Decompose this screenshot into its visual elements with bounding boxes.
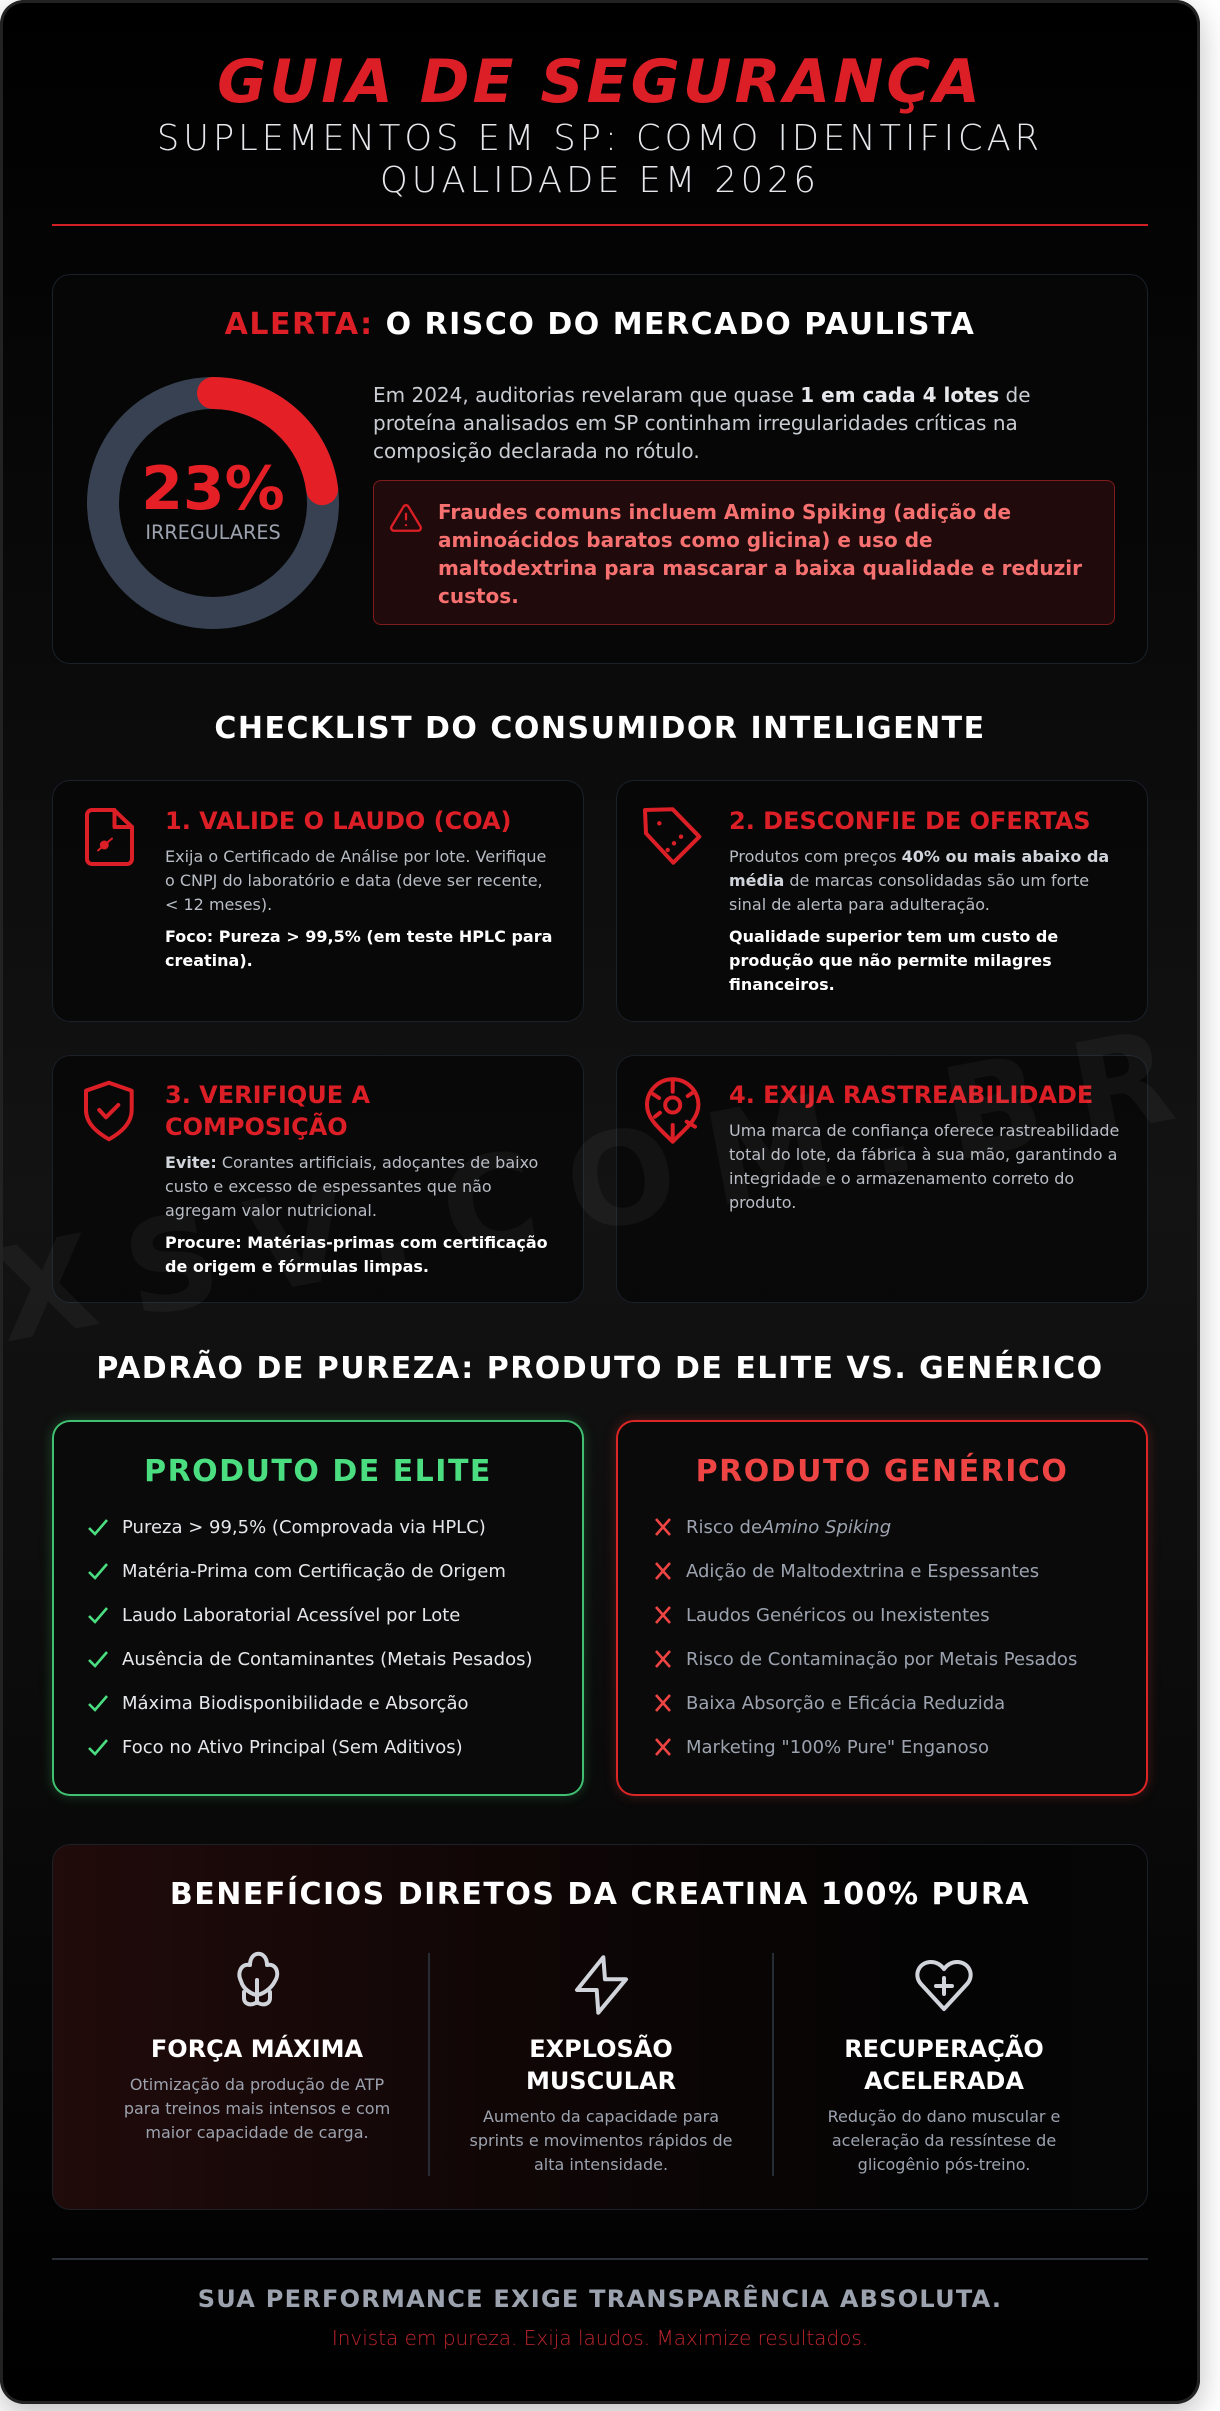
card focus text: Qualidade superior tem um custo de [729, 927, 1058, 946]
panel: elite product [52, 1420, 584, 1796]
elite list: Máxima Biodisponibilidade e Absorção [122, 1693, 468, 1714]
benefit text: Redução do dano muscular e [828, 2107, 1060, 2126]
benefit title [844, 2034, 1044, 2095]
generic list: Baixa Absorção e Eficácia Reduzida [686, 1693, 1005, 1714]
subtitle: QUALIDADE EM 2026 [380, 160, 820, 201]
card focus text: Foco: Pureza > 99,5% (em teste HPLC para [165, 927, 552, 946]
donut chart 23%: IRREGULARES [145, 521, 281, 544]
benefit title: RECUPERAÇÃO [844, 2035, 1044, 2063]
benefit text: Aumento da capacidade para [483, 2107, 719, 2126]
elite list: Ausência de Contaminantes (Metais Pesados) [122, 1649, 532, 1670]
benefit text: para treinos mais intensos e com [124, 2099, 390, 2118]
donut chart 23% [87, 377, 339, 629]
card focus text: produção que não permite milagres [729, 951, 1052, 970]
card text: Uma marca de confiança oferece rastreabilidade [729, 1121, 1119, 1140]
benefits heading: BENEFÍCIOS DIRETOS DA CREATINA 100% PURA [170, 1877, 1030, 1912]
benefit text: glicogênio pós-treino. [858, 2155, 1030, 2174]
elite list [88, 1517, 532, 1758]
card text: total do lote, da fábrica à sua mão, garantindo a [729, 1145, 1117, 1164]
icon: document [85, 808, 134, 866]
benefit: recovery [828, 1960, 1060, 2174]
panel: card 1 [52, 780, 584, 1022]
divider [428, 1953, 430, 2176]
card focus text [729, 927, 1058, 994]
generic list: Risco deAmino Spiking [686, 1517, 891, 1538]
benefit text [470, 2107, 732, 2174]
panel: benefits [52, 1844, 1148, 2210]
warning text: maltodextrina para mascarar a baixa qualidade e reduzir [438, 556, 1082, 580]
card focus text [165, 927, 552, 970]
icon: heart plus [915, 1960, 973, 2012]
panel: card 3 [52, 1055, 584, 1303]
heading: checklist: CHECKLIST DO CONSUMIDOR INTELIGENTE [214, 711, 986, 746]
panel: card 2 [616, 780, 1148, 1022]
card text: o CNPJ do laboratório e data (deve ser recente, [165, 871, 543, 890]
card focus text: Procure: Matérias-primas com certificação [165, 1233, 548, 1252]
benefit text: alta intensidade. [534, 2155, 668, 2174]
generic list: Laudos Genéricos ou Inexistentes [686, 1605, 990, 1626]
card title: 1. VALIDE O LAUDO (COA) [165, 807, 512, 835]
card text: sinal de alerta para adulteração. [729, 895, 990, 914]
benefit text: sprints e movimentos rápidos de [470, 2131, 732, 2150]
card title: 2. DESCONFIE DE OFERTAS [729, 807, 1091, 835]
icon: warning triangle [390, 504, 422, 532]
benefit title: MUSCULAR [526, 2067, 676, 2095]
icon: shield [84, 1080, 134, 1142]
icon: lightning bolt [574, 1955, 628, 2015]
alert text: proteína analisados em SP continham irregularidades críticas na [373, 411, 1018, 435]
warning box [373, 480, 1115, 625]
footer headline: SUA PERFORMANCE EXIGE TRANSPARÊNCIA ABSOLUTA. [198, 2285, 1002, 2313]
generic list [655, 1517, 1077, 1758]
card text: < 12 meses). [165, 895, 272, 914]
footer tagline: Invista em pureza. Exija laudos. Maximize resultados. [332, 2326, 868, 2350]
benefit: explosion [470, 1955, 732, 2174]
panel: generic product [616, 1420, 1148, 1796]
card text: média de marcas consolidadas são um forte [729, 871, 1089, 890]
card focus text: de origem e fórmulas limpas. [165, 1257, 429, 1276]
card text: integridade e o armazenamento correto do [729, 1169, 1074, 1188]
benefit title: FORÇA MÁXIMA [151, 2035, 363, 2063]
elite list: Matéria-Prima com Certificação de Origem [122, 1561, 506, 1582]
warning text [438, 500, 1082, 608]
panel: card 4 [616, 1055, 1148, 1303]
subtitle: SUPLEMENTOS EM SP: COMO IDENTIFICAR [157, 118, 1043, 159]
generic list: Adição de Maltodextrina e Espessantes [686, 1561, 1039, 1582]
benefit title: ACELERADA [864, 2067, 1024, 2095]
card text [729, 847, 1109, 914]
heading: purity standard: PADRÃO DE PUREZA: PRODUTO DE ELITE VS. GENÉRICO [96, 1351, 1104, 1386]
card focus text: creatina). [165, 951, 253, 970]
card text: custo e excesso de espessantes que não [165, 1177, 492, 1196]
benefit text [828, 2107, 1060, 2174]
donut chart 23%: 23% [141, 454, 285, 524]
watermark: XSV.COM.BR [0, 996, 1200, 1372]
alert text: composição declarada no rótulo. [373, 439, 700, 463]
subtitle [157, 118, 1043, 201]
benefit title [526, 2034, 676, 2095]
elite list: Laudo Laboratorial Acessível por Lote [122, 1605, 460, 1626]
generic list: Risco de Contaminação por Metais Pesados [686, 1649, 1077, 1670]
generic heading: PRODUTO GENÉRICO [696, 1454, 1068, 1489]
divider [772, 1953, 774, 2176]
card text: Produtos com preços 40% ou mais abaixo da [729, 847, 1109, 866]
elite heading: PRODUTO DE ELITE [144, 1454, 492, 1489]
elite list: Pureza > 99,5% (Comprovada via HPLC) [122, 1517, 486, 1538]
generic list: Marketing "100% Pure" Enganoso [686, 1737, 989, 1758]
alert text [373, 383, 1031, 463]
footer rule [52, 2258, 1148, 2260]
card text: agregam valor nutricional. [165, 1201, 377, 1220]
alert heading: ALERTA: O RISCO DO MERCADO PAULISTA [225, 307, 975, 342]
warning text: Fraudes comuns incluem Amino Spiking (adição de [438, 500, 1011, 524]
card text: produto. [729, 1193, 796, 1212]
icon: price tag [643, 807, 702, 865]
alert text: Em 2024, auditorias revelaram que quase 1 em cada 4 lotes de [373, 383, 1031, 407]
warning text: aminoácidos baratos como glicina) e uso de [438, 528, 933, 552]
benefit text: Otimização da produção de ATP [130, 2075, 384, 2094]
card focus text: financeiros. [729, 975, 835, 994]
icon: location target [645, 1077, 700, 1144]
benefit text: aceleração da ressíntese de [832, 2131, 1056, 2150]
header rule [52, 224, 1148, 226]
card title [165, 1081, 370, 1141]
benefit text [124, 2075, 390, 2142]
benefit text: maior capacidade de carga. [145, 2123, 369, 2142]
warning text: custos. [438, 584, 519, 608]
card text: Evite: Corantes artificiais, adoçantes de baixo [165, 1153, 538, 1172]
elite list: Foco no Ativo Principal (Sem Aditivos) [122, 1737, 463, 1758]
card text: Exija o Certificado de Análise por lote. Verifique [165, 847, 546, 866]
card text [729, 1121, 1119, 1212]
card text [165, 1153, 538, 1220]
card title: COMPOSIÇÃO [165, 1113, 348, 1141]
icon: strength [237, 1952, 280, 2006]
panel: alert [52, 274, 1148, 664]
card text [165, 847, 546, 914]
card title: 3. VERIFIQUE A [165, 1081, 370, 1109]
benefit title: EXPLOSÃO [529, 2035, 673, 2063]
benefit: strength [124, 1952, 390, 2142]
card focus text [165, 1233, 548, 1276]
card title: 4. EXIJA RASTREABILIDADE [729, 1081, 1093, 1109]
title: GUIA DE SEGURANÇA [217, 47, 983, 117]
